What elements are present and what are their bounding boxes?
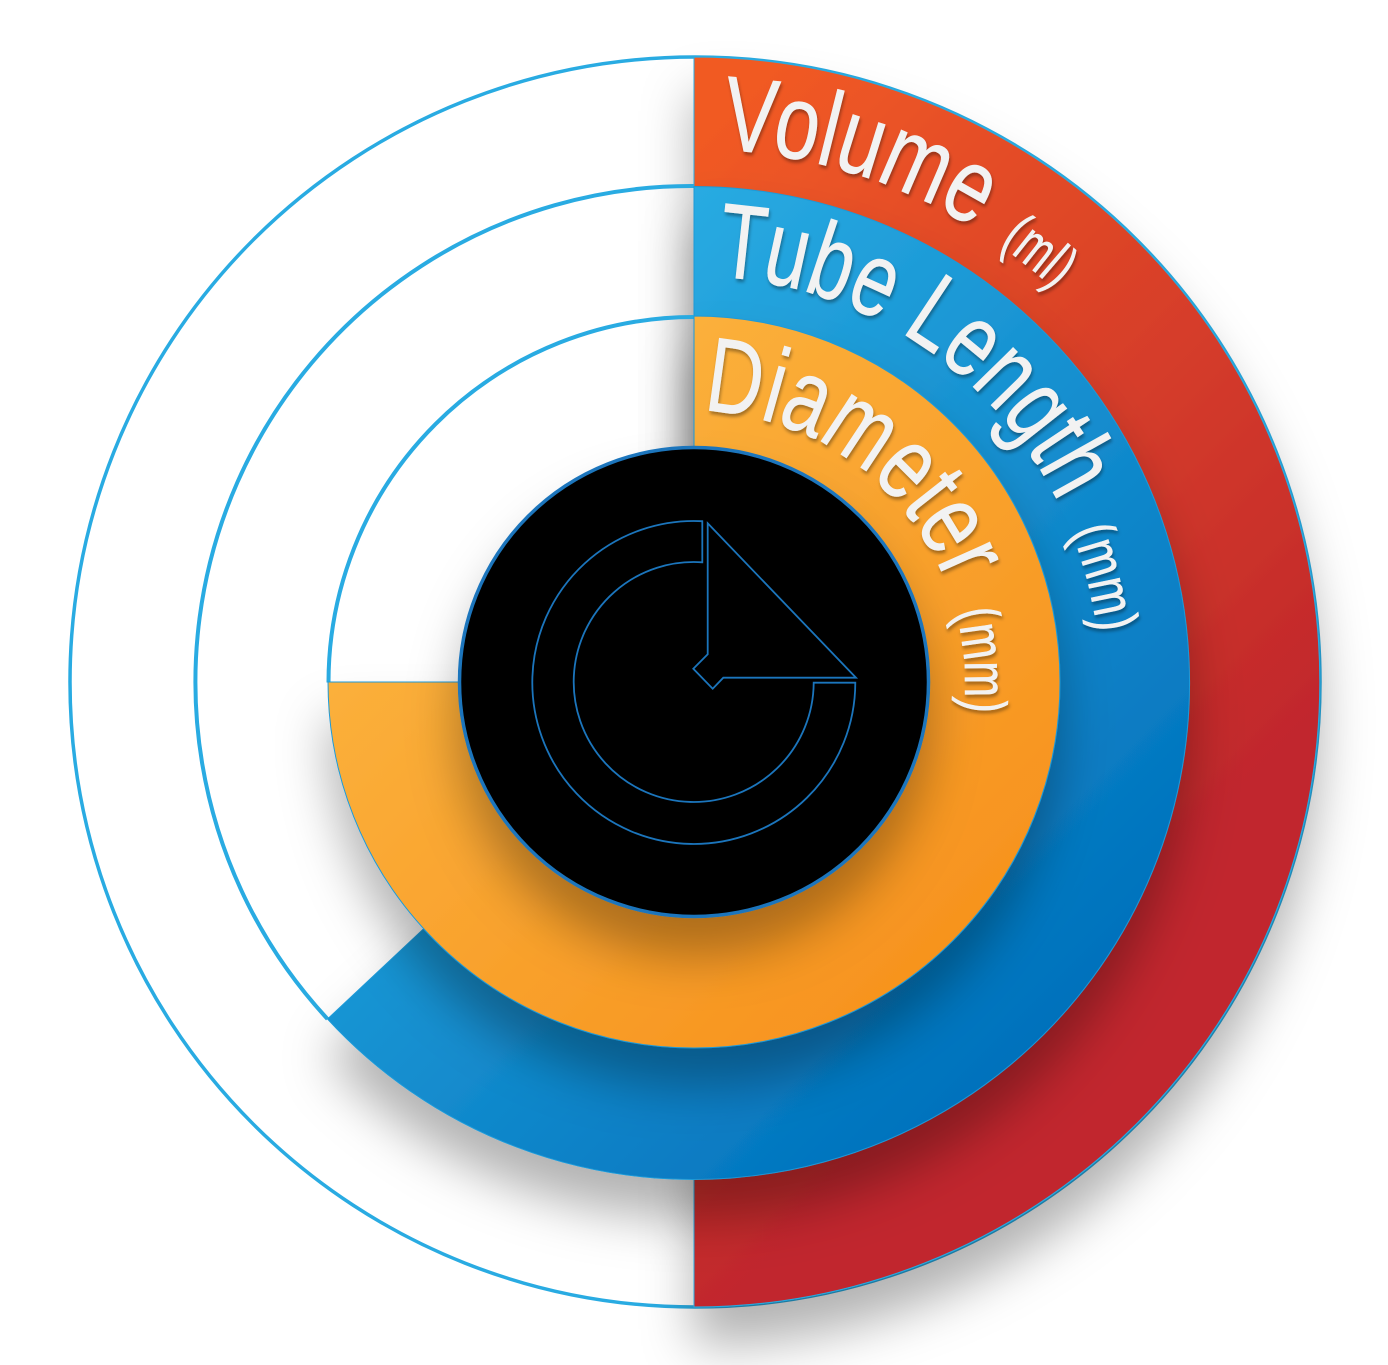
icon: wedge	[693, 523, 856, 689]
centre icon: ring and wedge outline	[532, 521, 856, 844]
label text: Tube Length: Tube Length	[724, 203, 1114, 502]
inner outline ring	[328, 317, 694, 682]
label text: (mm): (mm)	[946, 609, 1011, 716]
label: Tube Length (mm)	[724, 203, 1142, 634]
icon: open ring	[532, 521, 855, 844]
red volume segment	[694, 57, 1320, 1307]
label text: Volume: Volume	[728, 76, 995, 226]
label: Diameter (mm)	[708, 338, 1011, 716]
black centre disc	[460, 448, 928, 916]
orange diameter segment	[328, 316, 1060, 1048]
middle outline ring	[195, 186, 694, 1019]
label text: Diameter: Diameter	[708, 338, 1001, 576]
blue tube length segment	[328, 186, 1190, 1179]
label: Volume (ml)	[728, 76, 1079, 297]
label text: (mm): (mm)	[1063, 525, 1142, 634]
label text: (ml): (ml)	[999, 215, 1079, 297]
